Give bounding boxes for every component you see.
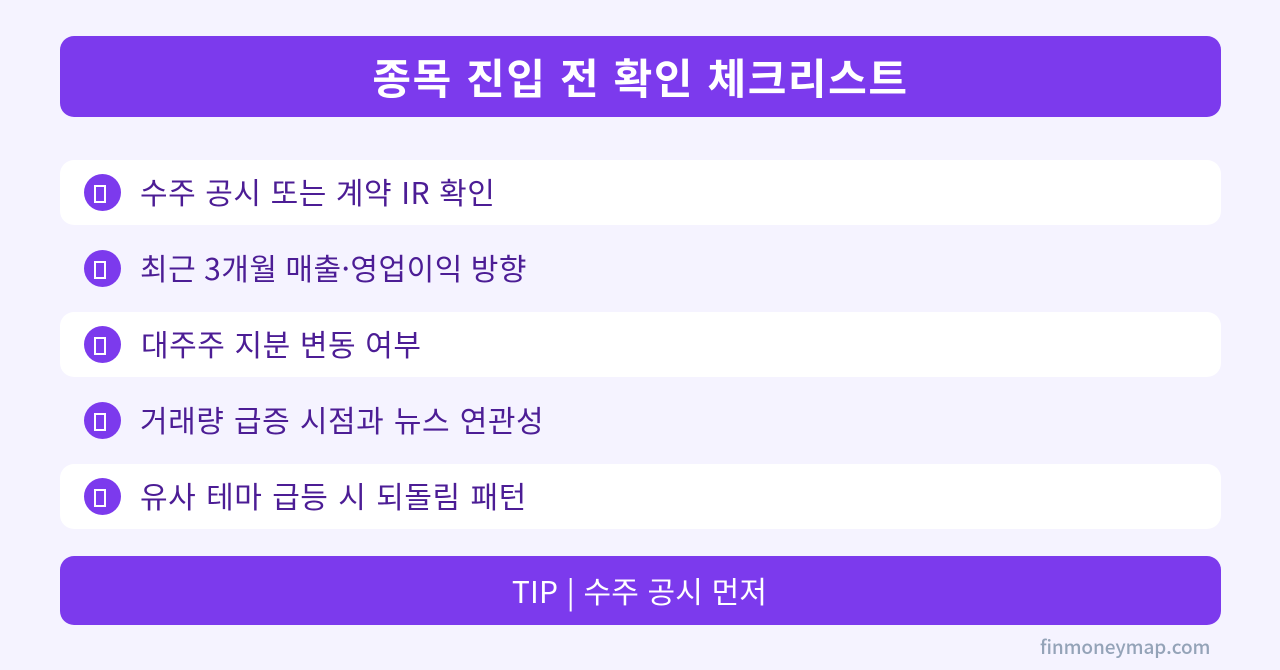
- icon: item 3 bullet: [84, 326, 121, 363]
- checklist item 4: [84, 397, 544, 441]
- tip banner: TIP | 수주 공시 먼저: [512, 568, 767, 612]
- brand watermark: finmoneymap.com: [1040, 633, 1210, 660]
- text: item 1: 수주 공시 또는 계약 IR 확인: [140, 169, 495, 213]
- text: item 3: 대주주 지분 변동 여부: [141, 321, 422, 365]
- title banner: 종목 진입 전 확인 체크리스트: [372, 46, 909, 107]
- text: item 2: 최근 3개월 매출·영업이익 방향: [140, 245, 527, 289]
- checklist item 5: [60, 464, 1221, 529]
- checklist item 2: [84, 245, 527, 289]
- icon: item 1 bullet: [84, 174, 121, 211]
- icon: item 5 bullet: [84, 478, 121, 515]
- text: item 5: 유사 테마 급등 시 되돌림 패턴: [140, 473, 527, 517]
- icon: item 2 bullet: [84, 250, 121, 287]
- tip banner: [60, 556, 1221, 625]
- text: item 4: 거래량 급증 시점과 뉴스 연관성: [140, 397, 544, 441]
- title banner: [60, 36, 1221, 117]
- checklist item 3: [60, 312, 1221, 377]
- icon: item 4 bullet: [84, 402, 121, 439]
- checklist item 1: [60, 160, 1221, 225]
